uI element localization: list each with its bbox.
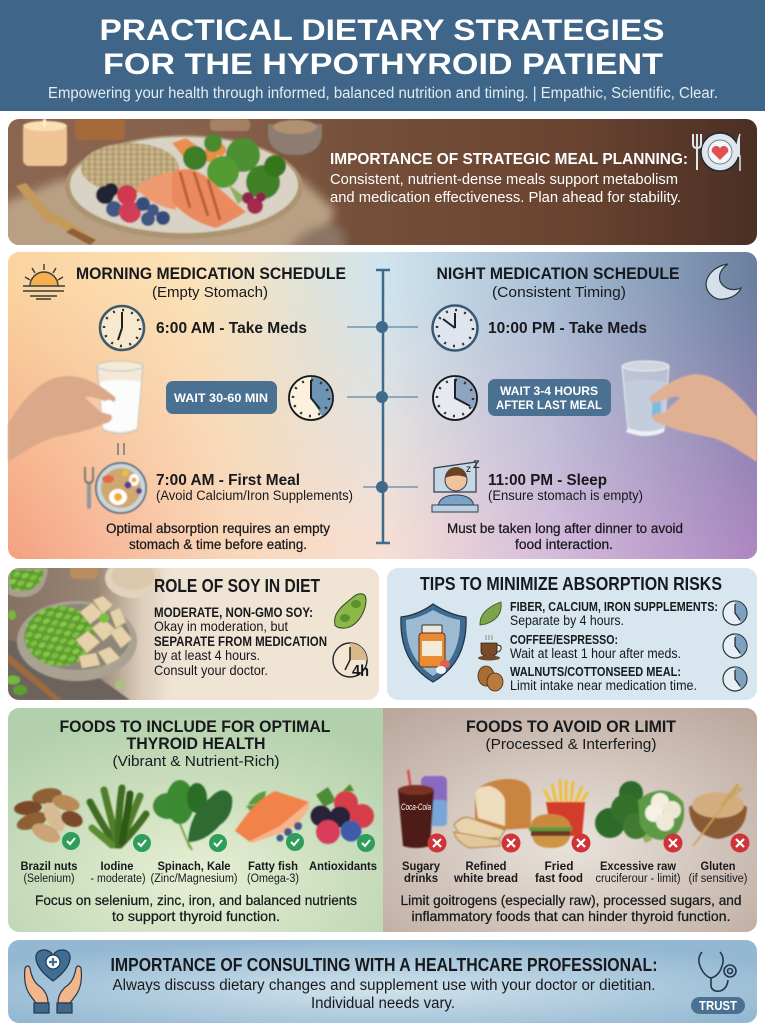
food: sugary drinks: [398, 770, 447, 885]
photo: edamame and tofu bowl: [6, 558, 161, 700]
text: consult body: [112, 977, 656, 1012]
food: iodine seaweed: - moderate): [90, 873, 146, 885]
food: gluten bowl with wheat: (if sensitive): [688, 873, 748, 885]
note: night timing: [447, 521, 683, 552]
food: sugary drinks: Sugary: [402, 859, 440, 873]
text: first meal step: [156, 472, 353, 503]
heading: meal planning: IMPORTANCE OF STRATEGIC MEAL PLANNING:: [330, 151, 688, 168]
food: antioxidant berries: Antioxidants: [309, 859, 377, 873]
food: gluten bowl with wheat: Gluten: [700, 859, 736, 873]
text: 6:00 AM step: 6:00 AM - Take Meds: [156, 320, 307, 337]
text: soy guidance: by at least 4 hours.: [154, 647, 260, 663]
heading: foods to avoid: FOODS TO AVOID OR LIMIT: [466, 717, 677, 736]
tip: coffee: COFFEE/ESPRESSO:: [510, 633, 618, 647]
photo: salmon plate on table: [0, 119, 346, 255]
badge: trust: [691, 997, 745, 1014]
text: soy guidance: SEPARATE FROM MEDICATION: [154, 634, 327, 649]
icon: soy pod: [335, 594, 366, 628]
text: first meal step: 7:00 AM - First Meal: [156, 472, 300, 489]
food: raw cruciferous vegetables: [595, 781, 684, 885]
text: consult body: Individual needs vary.: [311, 995, 455, 1012]
icon: crescent moon: [706, 264, 741, 299]
badge: wait 3-4 hours: [488, 379, 611, 416]
icon: breakfast plate: [85, 463, 146, 513]
heading: foods to include: [60, 717, 330, 770]
text: soy guidance: Consult your doctor.: [154, 662, 268, 678]
food: white bread: [453, 779, 531, 885]
panel: minimize absorption risks: [387, 568, 757, 700]
icon: pause marks: [118, 443, 124, 455]
badge: wait 3-4 hours: AFTER LAST MEAL: [496, 398, 602, 412]
tip: walnuts: [478, 665, 747, 693]
note: night timing: Must be taken long after dinner to avoid: [447, 521, 683, 536]
food: brazil nuts: (Selenium): [24, 873, 75, 885]
title: [100, 14, 664, 81]
food: sugary drinks: drinks: [404, 871, 438, 885]
food: raw cruciferous vegetables: Excessive raw: [600, 859, 677, 873]
panel: role of soy: [6, 558, 379, 700]
heading: night schedule: NIGHT MEDICATION SCHEDULE: [436, 264, 680, 283]
text: include summary: to support thyroid function.: [112, 908, 280, 924]
heading: role of soy: ROLE OF SOY IN DIET: [154, 576, 320, 596]
tip: supplements: [480, 600, 747, 628]
food: gluten bowl with wheat: [688, 784, 750, 885]
text: include summary: [35, 892, 357, 924]
icon: shield with medication bottle: [401, 604, 466, 682]
food: white bread: white bread: [453, 871, 518, 885]
title: FOR THE HYPOTHYROID PATIENT: [103, 48, 663, 81]
text: soy guidance: [154, 605, 327, 678]
icon: plate with heart: [693, 133, 740, 171]
text: soy guidance: Okay in moderation, but: [154, 618, 288, 634]
food: white bread: Refined: [466, 859, 506, 873]
food: fries and burger: fast food: [535, 871, 583, 885]
badge: wait 30-60 min: WAIT 30-60 MIN: [174, 391, 268, 405]
text: avoid summary: [400, 892, 742, 924]
text: meal planning body: [330, 171, 681, 206]
text: sleep step: 11:00 PM - Sleep: [488, 472, 607, 489]
note: morning absorption: [106, 521, 330, 552]
heading: foods to avoid: [466, 717, 677, 753]
panel: strategic meal planning: [0, 119, 757, 255]
note: morning absorption: stomach & time before eating.: [129, 537, 307, 552]
text: avoid summary: inflammatory foods that can hinder thyroid function.: [412, 908, 730, 924]
panel: consult a professional: [8, 940, 757, 1023]
heading: morning schedule: (Empty Stomach): [152, 284, 268, 301]
food: sugary drinks: Coca-Cola: [401, 802, 431, 812]
food: iodine seaweed: Iodine: [100, 859, 134, 873]
icon: stethoscope: [699, 952, 736, 991]
header banner: [0, 0, 765, 111]
title: PRACTICAL DIETARY STRATEGIES: [100, 14, 664, 47]
note: morning absorption: Optimal absorption requires an empty: [106, 521, 330, 536]
tip: supplements: Separate by 4 hours.: [510, 613, 624, 628]
heading: consult: IMPORTANCE OF CONSULTING WITH A HEALTHCARE PROFESSIONAL:: [110, 955, 658, 975]
tip: coffee: [478, 633, 747, 661]
heading: absorption tips: TIPS TO MINIMIZE ABSORPTION RISKS: [420, 574, 722, 594]
badge: wait 3-4 hours: WAIT 3-4 HOURS: [500, 384, 598, 398]
heading: night schedule: (Consistent Timing): [492, 284, 626, 301]
food: spinach and kale: (Zinc/Magnesium): [150, 873, 238, 885]
icon: 4-hour clock: [333, 643, 369, 680]
panel: medication schedules: [8, 252, 757, 559]
subtitle: Empowering your health through informed, balanced nutrition and timing. | Empathic, Scientific, Clear.: [48, 85, 718, 102]
text: meal planning body: Consistent, nutrient-dense meals support metabolism: [330, 171, 678, 188]
heading: foods to avoid: (Processed & Interfering): [486, 736, 656, 753]
food: fries and burger: [529, 779, 590, 885]
text: include summary: Focus on selenium, zinc, iron, and balanced nutrients: [35, 892, 357, 908]
tip: walnuts: Limit intake near medication time.: [510, 678, 697, 693]
food: fatty fish: (Omega-3): [247, 873, 299, 885]
food: raw cruciferous vegetables: cruciferour - limit): [596, 873, 681, 885]
icon: sleeping person: [432, 459, 480, 512]
icon: clock 10:00: [432, 306, 478, 350]
icon: sunrise: [23, 264, 65, 299]
text: meal planning body: and medication effectiveness. Plan ahead for stability.: [330, 189, 681, 206]
food: fatty fish: [235, 791, 309, 885]
heading: morning schedule: [76, 264, 346, 301]
text: sleep step: [488, 472, 643, 503]
heading: night schedule: [436, 264, 680, 301]
food: antioxidant berries: [309, 784, 377, 873]
heading: foods to include: (Vibrant & Nutrient-Rich): [112, 753, 280, 770]
text: consult body: Always discuss dietary changes and supplement use with your doctor or dietitian.: [112, 977, 656, 994]
heading: foods to include: FOODS TO INCLUDE FOR OPTIMAL: [60, 717, 330, 736]
food: brazil nuts: [13, 786, 85, 885]
icon: hands holding heart: [25, 950, 81, 1013]
tip: supplements: FIBER, CALCIUM, IRON SUPPLEMENTS:: [510, 600, 718, 614]
icon: clock with wait wedge: [289, 376, 333, 420]
icon: clock 6:00: [100, 306, 144, 350]
heading: morning schedule: MORNING MEDICATION SCHEDULE: [76, 264, 346, 283]
heading: foods to include: THYROID HEALTH: [126, 734, 266, 753]
timeline: [347, 270, 418, 543]
icon: clock with night wait wedge: [433, 376, 477, 420]
badge: wait 30-60 min: [166, 381, 277, 414]
illustration: morning hand with glass: [8, 361, 143, 462]
icon: sleeping person: z: [466, 464, 471, 475]
food: spinach and kale: [150, 780, 238, 885]
text: 10:00 PM step: 10:00 PM - Take Meds: [488, 320, 647, 337]
illustration: night hand with glass: [622, 361, 757, 462]
food: iodine seaweed: [90, 788, 151, 885]
food: fries and burger: Fried: [544, 859, 574, 873]
food: spinach and kale: Spinach, Kale: [158, 859, 231, 873]
text: soy guidance: MODERATE, NON-GMO SOY:: [154, 605, 313, 620]
text: avoid summary: Limit goitrogens (especially raw), processed sugars, and: [400, 892, 742, 908]
panel: foods to include: [8, 708, 383, 932]
text: first meal step: (Avoid Calcium/Iron Supplements): [156, 488, 353, 503]
food: fatty fish: Fatty fish: [248, 859, 298, 873]
icon: sleeping person: Z: [473, 459, 480, 471]
panel: foods to avoid: [383, 708, 757, 932]
food: brazil nuts: Brazil nuts: [20, 859, 78, 873]
note: night timing: food interaction.: [515, 537, 613, 552]
tip: coffee: Wait at least 1 hour after meds.: [510, 646, 681, 661]
badge: trust: TRUST: [699, 999, 737, 1013]
icon: 4-hour clock: 4h: [352, 663, 369, 680]
text: sleep step: (Ensure stomach is empty): [488, 488, 643, 503]
tip: walnuts: WALNUTS/COTTONSEED MEAL:: [510, 665, 681, 679]
